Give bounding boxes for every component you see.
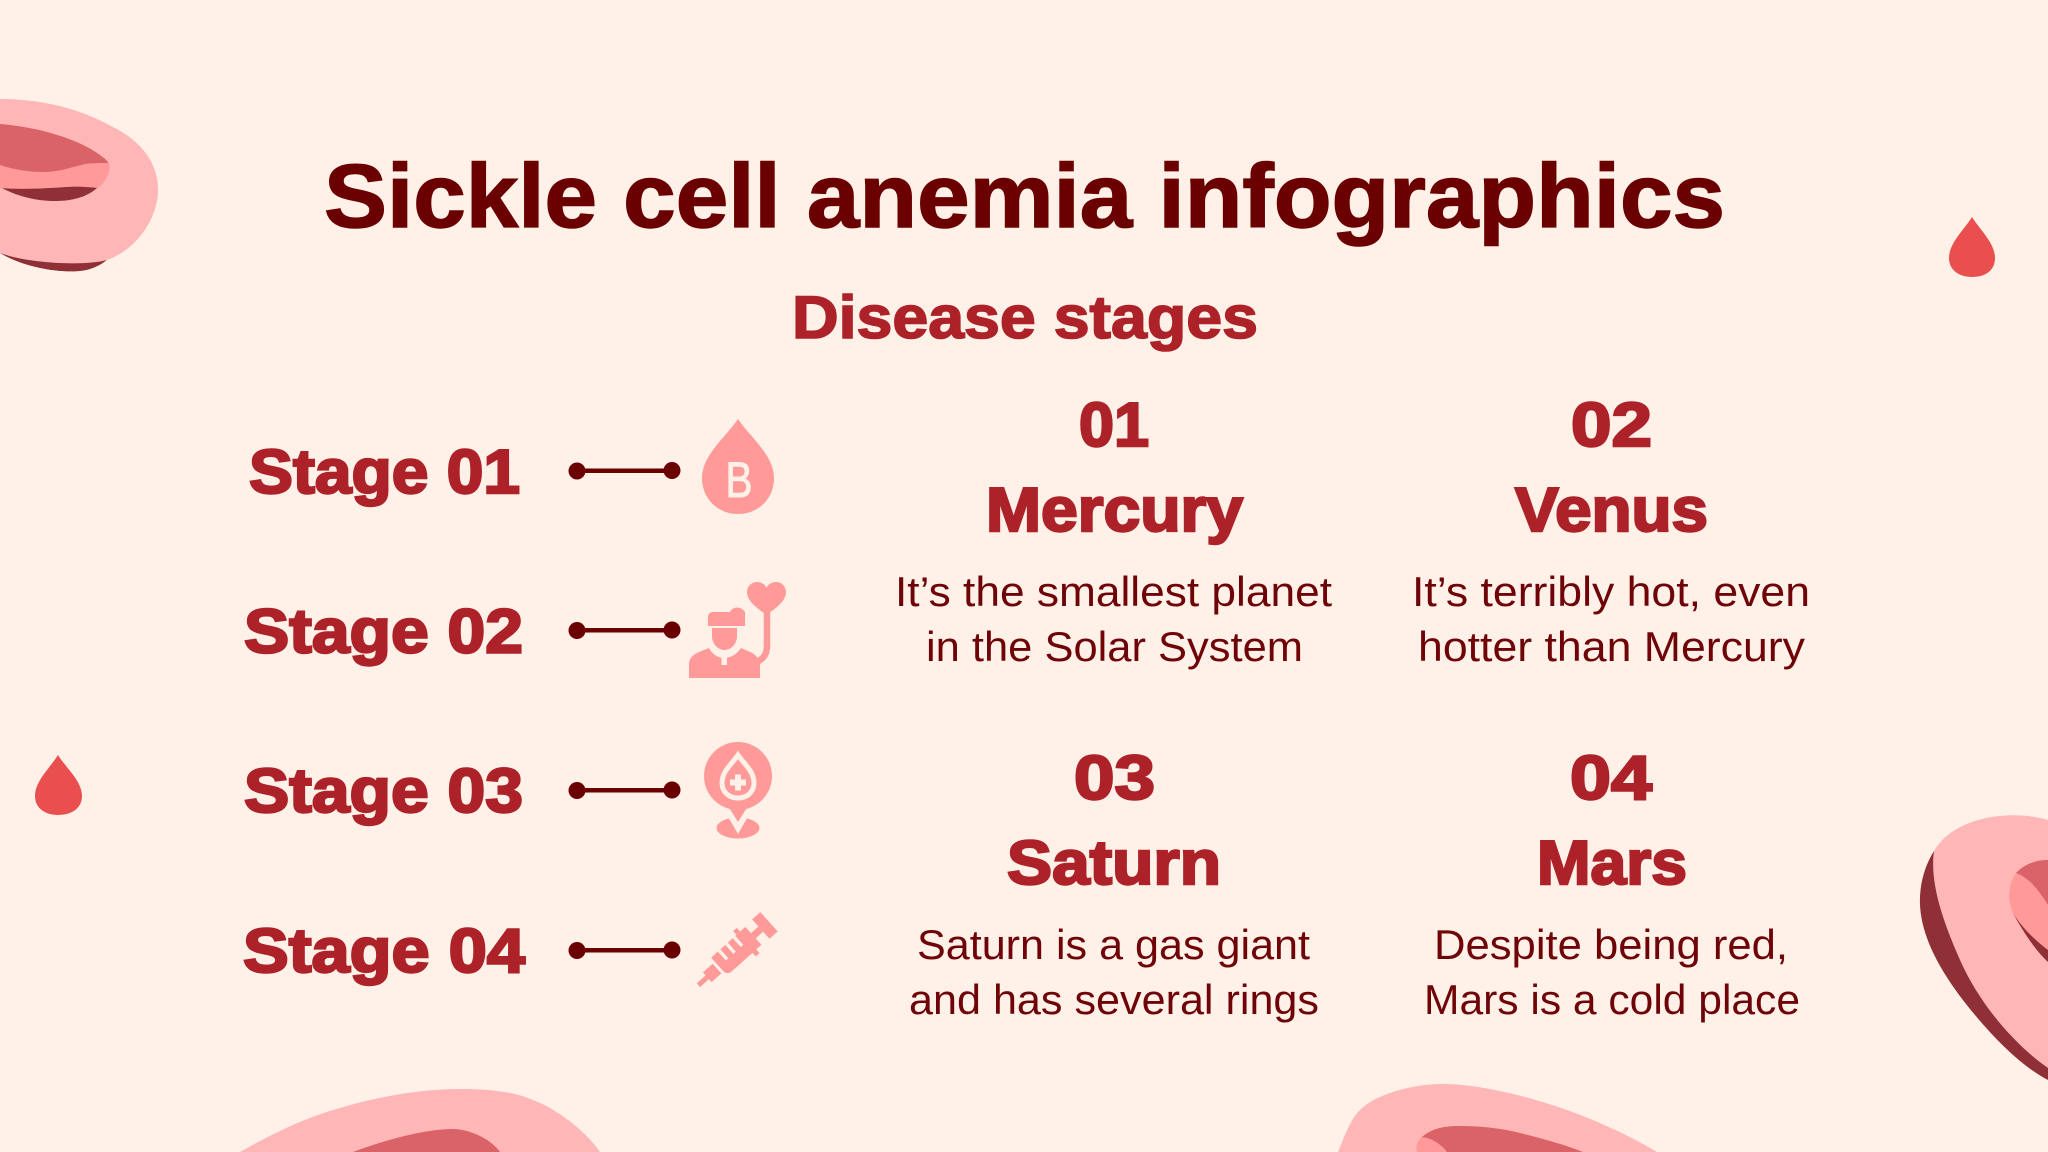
connector 3 bbox=[568, 782, 680, 799]
stage label 1: Stage 01 bbox=[249, 438, 520, 507]
connector 1 bbox=[568, 462, 680, 480]
info block 03 Saturn: Saturn bbox=[1007, 829, 1221, 898]
stage row 1 bbox=[249, 419, 774, 514]
info block 03 Saturn: 03 bbox=[1074, 744, 1155, 813]
stage label 3: Stage 03 bbox=[244, 757, 523, 826]
info block 04 Mars: Despite being red, bbox=[1434, 921, 1788, 968]
stage label 4: Stage 04 bbox=[243, 917, 526, 986]
icon: blood type B drop bbox=[702, 419, 774, 514]
info block 01 Mercury: in the Solar System bbox=[926, 623, 1303, 670]
decoration: left blood drop bbox=[35, 755, 82, 815]
stage row 4 bbox=[243, 909, 780, 998]
decoration: top-right blood drop bbox=[1949, 217, 1995, 277]
stage label 2: Stage 02 bbox=[244, 598, 523, 666]
info block 02 Venus bbox=[1412, 391, 1810, 670]
info block 04 Mars bbox=[1424, 744, 1800, 1023]
stage row 2 bbox=[244, 582, 786, 678]
icon: syringe bbox=[687, 909, 780, 998]
connector 4 bbox=[568, 942, 680, 959]
info block 01 Mercury: Mercury bbox=[986, 476, 1244, 545]
connector 2 bbox=[568, 622, 680, 639]
decoration: right blood cell bbox=[1920, 815, 2048, 1080]
info block 02 Venus: Venus bbox=[1515, 476, 1708, 545]
title: Sickle cell anemia infographics bbox=[324, 147, 1725, 247]
info block 02 Venus: 02 bbox=[1571, 391, 1652, 460]
info block 02 Venus: hotter than Mercury bbox=[1418, 623, 1805, 670]
icon: person with heart balloon bbox=[689, 582, 786, 678]
info block 01 Mercury: It’s the smallest planet bbox=[895, 568, 1332, 615]
info block 02 Venus: It’s terribly hot, even bbox=[1412, 568, 1810, 615]
info block 01 Mercury: 01 bbox=[1079, 391, 1149, 460]
decoration: bottom-left blood cell bbox=[240, 1089, 600, 1152]
info block 04 Mars: Mars bbox=[1537, 829, 1687, 898]
info block 01 Mercury bbox=[895, 391, 1332, 670]
decoration: top-left blood cell bbox=[0, 99, 158, 271]
icon: blood type B drop: B bbox=[726, 452, 752, 508]
subtitle: Disease stages bbox=[792, 284, 1258, 351]
icon: location pin with blood drop bbox=[704, 742, 772, 838]
info block 03 Saturn: Saturn is a gas giant bbox=[917, 921, 1310, 968]
info block 04 Mars: 04 bbox=[1570, 744, 1653, 813]
info block 04 Mars: Mars is a cold place bbox=[1424, 976, 1800, 1023]
info block 03 Saturn bbox=[909, 744, 1319, 1023]
stage row 3 bbox=[244, 742, 772, 838]
info block 03 Saturn: and has several rings bbox=[909, 976, 1319, 1023]
decoration: bottom-right blood cell bbox=[1338, 1084, 1657, 1152]
